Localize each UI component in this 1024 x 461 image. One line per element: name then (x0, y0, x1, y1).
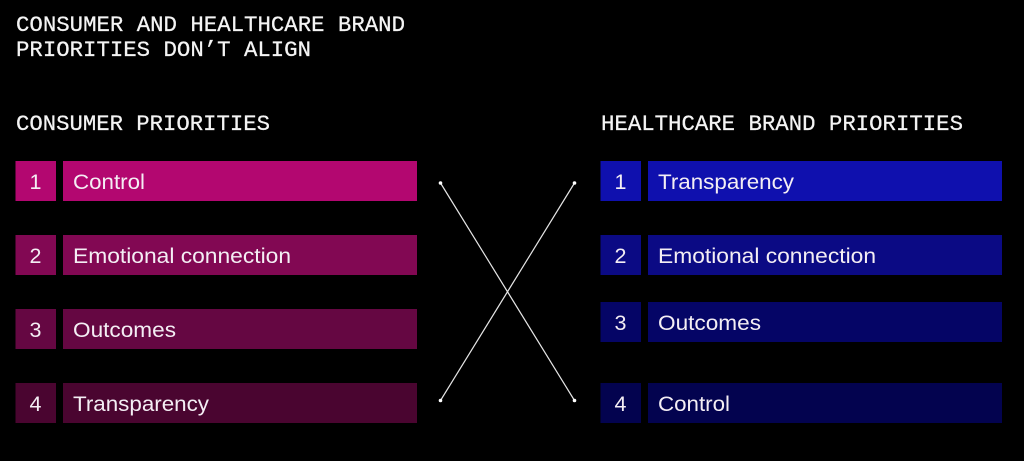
healthcare row 3: outcomes: Outcomes (658, 311, 761, 335)
healthcare row 2: emotional connection (600, 235, 1002, 275)
consumer row 4: transparency: Transparency (73, 392, 209, 416)
healthcare row 2: emotional connection: 2 (615, 244, 626, 268)
consumer row 1: control (16, 161, 417, 201)
crossing connector lines (439, 181, 576, 402)
heading: healthcare brand priorities: HEALTHCARE BRAND PRIORITIES (601, 111, 963, 137)
line: transparency to transparency (439, 181, 576, 402)
heading: consumer priorities: CONSUMER PRIORITIES (16, 111, 270, 137)
consumer row 2: emotional connection: 2 (30, 244, 41, 268)
consumer row 1: control: Control (73, 170, 145, 194)
healthcare row 1: transparency: Transparency (658, 170, 794, 194)
healthcare row 3: outcomes (600, 302, 1002, 342)
healthcare row 4: control (600, 383, 1002, 423)
title (16, 12, 405, 63)
consumer row 1: control: 1 (30, 170, 41, 194)
consumer row 4: transparency: 4 (30, 392, 42, 416)
healthcare row 3: outcomes: 3 (615, 311, 627, 335)
title: PRIORITIES DON’T ALIGN (16, 37, 311, 63)
panel: healthcare brand priorities list (600, 161, 1002, 423)
consumer row 3: outcomes (16, 309, 417, 349)
title: CONSUMER AND HEALTHCARE BRAND (16, 12, 405, 38)
healthcare row 4: control: Control (658, 392, 730, 416)
healthcare row 1: transparency: 1 (615, 170, 626, 194)
healthcare row 2: emotional connection: Emotional connection (658, 244, 876, 268)
line: control to control (439, 181, 576, 402)
consumer row 3: outcomes: Outcomes (73, 318, 176, 342)
consumer row 3: outcomes: 3 (30, 318, 42, 342)
healthcare row 1: transparency (600, 161, 1002, 201)
consumer row 2: emotional connection: Emotional connection (73, 244, 291, 268)
panel: consumer priorities list (16, 161, 417, 423)
consumer row 4: transparency (16, 383, 417, 423)
consumer row 2: emotional connection (16, 235, 417, 275)
healthcare row 4: control: 4 (615, 392, 627, 416)
